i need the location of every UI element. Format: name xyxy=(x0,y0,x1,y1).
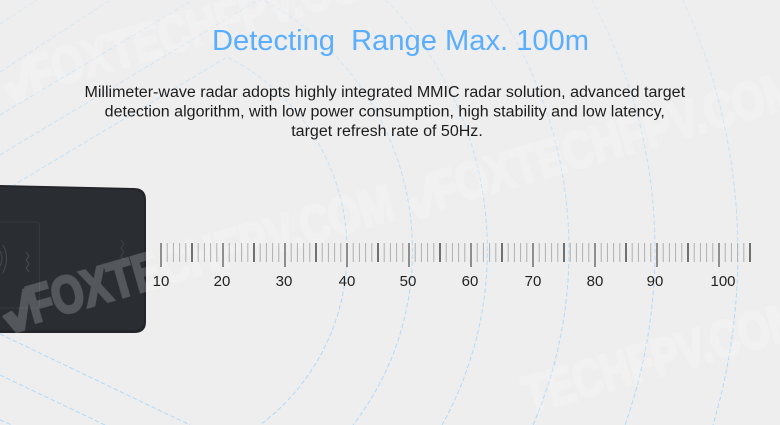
distance ruler labels: 60 xyxy=(462,273,478,290)
distance ruler ticks xyxy=(161,243,750,267)
distance ruler labels: 40 xyxy=(339,273,355,290)
distance ruler labels: 70 xyxy=(525,273,541,290)
watermark across device xyxy=(0,174,401,342)
distance ruler labels: 90 xyxy=(647,273,663,290)
watermark across device: FOXTECHFPV.COM xyxy=(20,174,401,334)
description text: target refresh rate of 50Hz. xyxy=(291,122,483,140)
description text: Millimeter-wave radar adopts highly integrated MMIC radar solution, advanced target xyxy=(84,83,686,101)
distance ruler labels: 50 xyxy=(400,273,416,290)
radar device xyxy=(0,185,146,333)
distance ruler labels: 10 xyxy=(153,273,169,290)
distance ruler labels: 30 xyxy=(276,273,292,290)
distance ruler labels xyxy=(153,273,736,290)
title: Detecting Range Max. 100m xyxy=(212,25,589,57)
distance ruler labels: 80 xyxy=(587,273,603,290)
distance ruler labels: 20 xyxy=(214,273,230,290)
description text: detection algorithm, with low power consumption, high stability and low latency, xyxy=(105,102,665,120)
distance ruler labels: 100 xyxy=(710,273,736,290)
